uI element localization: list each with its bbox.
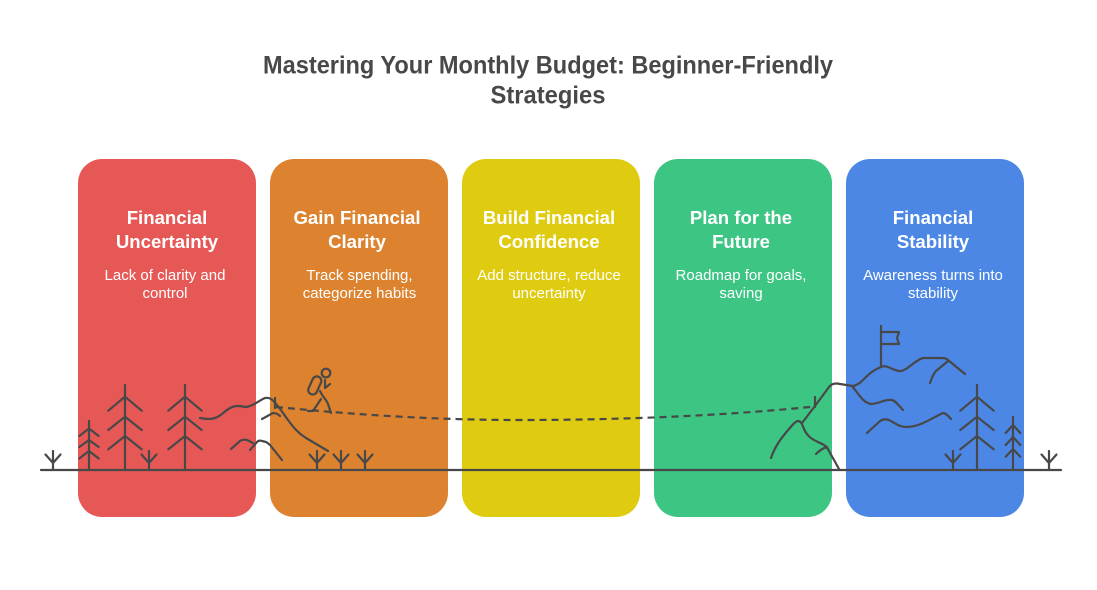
panel: build financial confidence: Confidence [498, 231, 600, 252]
icon: ground sprouts [310, 451, 372, 470]
title [263, 52, 833, 110]
panel: financial stability: Financial [893, 207, 973, 228]
icon: left hills [200, 398, 328, 460]
panel: financial uncertainty [78, 159, 256, 517]
title: Mastering Your Monthly Budget: Beginner-Friendly [263, 52, 833, 80]
panel: plan for the future: Roadmap for goals, [676, 267, 806, 284]
panel: plan for the future: saving [719, 285, 763, 302]
panel: gain financial clarity [270, 159, 448, 517]
icon: right forest [946, 385, 1056, 470]
panel: financial uncertainty: control [142, 285, 188, 302]
title: Strategies [490, 82, 606, 110]
panel: financial stability [846, 159, 1024, 517]
panel: build financial confidence: Build Financial [483, 207, 615, 228]
panel: build financial confidence: uncertainty [512, 285, 586, 302]
dashed path [276, 406, 815, 420]
icon: hiker [307, 369, 331, 413]
panel: plan for the future: Plan for the [690, 207, 792, 228]
panel: financial stability: Stability [897, 231, 970, 252]
panel: financial stability: stability [908, 285, 959, 302]
panel: plan for the future: Future [712, 231, 770, 252]
panel: build financial confidence [462, 159, 640, 517]
panel: financial stability: Awareness turns into [863, 267, 1003, 284]
icon: right mountain with flag [771, 326, 965, 469]
panel: gain financial clarity: Gain Financial [293, 207, 421, 228]
panel: gain financial clarity: Track spending, [306, 267, 413, 284]
panel: gain financial clarity: Clarity [328, 231, 387, 252]
panel: financial uncertainty: Financial [127, 207, 207, 228]
panel: gain financial clarity: categorize habits [303, 285, 416, 302]
panel: build financial confidence: Add structure, reduce [477, 267, 621, 284]
panel: plan for the future [654, 159, 832, 517]
icon: left forest [46, 385, 202, 470]
panel: financial uncertainty: Uncertainty [116, 231, 219, 252]
ground line [41, 469, 1061, 471]
panel: financial uncertainty: Lack of clarity and [105, 267, 225, 284]
